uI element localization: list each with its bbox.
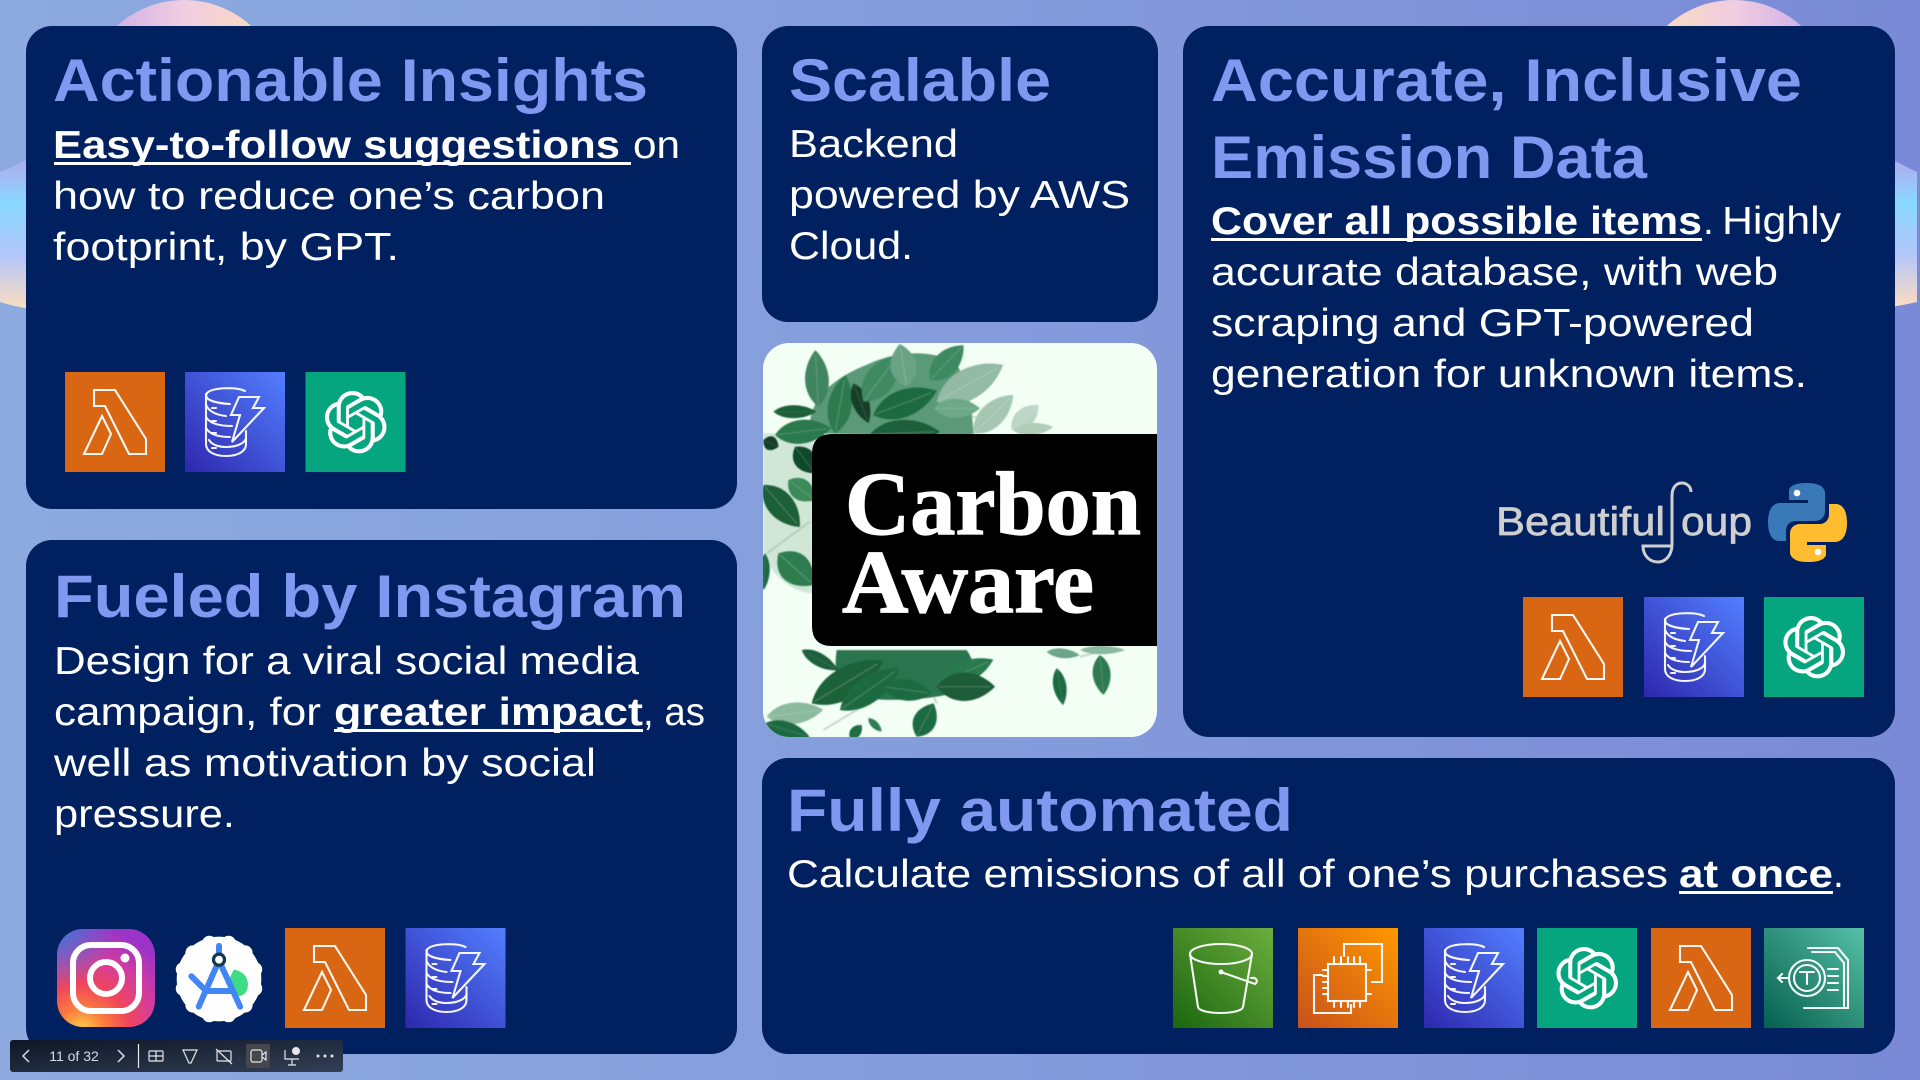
text block: emission data description: [1211, 200, 1842, 396]
text block: automation description: .: [1833, 853, 1844, 896]
text block: Instagram description: campaign, for: [54, 691, 321, 734]
icon: ChatGPT: [1764, 597, 1864, 697]
heading: Fueled by Instagram: Fueled by Instagram: [54, 563, 686, 630]
text block: emission data description: accurate database, with web: [1211, 251, 1778, 294]
text block: scalable description: Cloud.: [789, 225, 913, 268]
text block: Instagram description: pressure.: [54, 793, 235, 836]
text block: actionable insights description: on: [633, 124, 680, 167]
icon: ChatGPT: [1537, 928, 1637, 1028]
icon: DynamoDB: [1424, 928, 1524, 1028]
icon: AWS Lambda: [1523, 597, 1623, 697]
panel: Scalable: [762, 26, 1158, 322]
text block: automation description: Calculate emissions of all of one’s purchases: [787, 853, 1668, 896]
text block: emission data description: generation for unknown items.: [1211, 353, 1807, 396]
logo wordmark: Carbon Aware: Aware: [842, 533, 1094, 632]
black title plate: [812, 434, 1157, 646]
panel: Accurate, Inclusive Emission Data: [1183, 26, 1895, 737]
text block: scalable description: [789, 123, 1130, 268]
text block: emission data description: Highly: [1722, 200, 1842, 243]
heading: Actionable Insights: Actionable Insights: [53, 47, 648, 114]
logo: Beautiful Soup: Beautiful: [1496, 500, 1665, 544]
icon: ChatGPT: [306, 372, 406, 472]
heading: Scalable: Scalable: [789, 47, 1051, 114]
icon: Amazon Textract: [1764, 928, 1864, 1028]
icon: AWS Lambda: [65, 372, 165, 472]
icon: Amazon S3: [1173, 928, 1273, 1028]
panel: Actionable Insights: [26, 26, 737, 509]
text block: automation description: at once: [1679, 853, 1833, 896]
logo: Beautiful Soup: [1496, 483, 1752, 562]
text block: emission data description: .: [1703, 200, 1714, 243]
panel: Carbon Aware logo image: [753, 337, 1157, 745]
icon: AWS Lambda: [1651, 928, 1751, 1028]
text block: Instagram description: , as: [643, 691, 705, 734]
text block: actionable insights description: [53, 124, 680, 269]
text block: scalable description: Backend: [789, 123, 958, 166]
text block: Instagram description: well as motivation by social: [53, 742, 596, 785]
icon: DynamoDB: [1644, 597, 1744, 697]
slide counter: 11 of 32: [49, 1048, 99, 1064]
logo: Beautiful Soup: oup: [1681, 500, 1752, 544]
text block: emission data description: Cover all possible items: [1211, 200, 1702, 243]
icon: Amazon EC2: [1298, 928, 1398, 1028]
text block: Instagram description: Design for a viral social media: [54, 640, 639, 683]
icon: Android Studio: [176, 936, 262, 1022]
text block: emission data description: scraping and GPT-powered: [1211, 302, 1754, 345]
icon: Instagram: [57, 929, 155, 1027]
icon: DynamoDB: [406, 928, 506, 1028]
heading: Accurate, Inclusive Emission Data: [1211, 47, 1802, 191]
heading: Accurate, Inclusive Emission Data: Accurate, Inclusive: [1211, 47, 1802, 114]
foliage illustration: [753, 337, 1125, 745]
panel: Fully automated: [762, 758, 1895, 1054]
text block: Instagram description: greater impact: [334, 691, 643, 734]
text block: scalable description: powered by AWS: [789, 174, 1130, 217]
logo wordmark: Carbon Aware: Carbon: [845, 455, 1141, 554]
icon: AWS Lambda: [285, 928, 385, 1028]
icon: DynamoDB: [185, 372, 285, 472]
text block: actionable insights description: how to reduce one’s carbon: [53, 175, 605, 218]
heading: Fully automated: Fully automated: [787, 777, 1293, 844]
logo: Python: [1768, 483, 1847, 562]
text block: actionable insights description: Easy-to-follow suggestions: [53, 124, 620, 167]
heading: Accurate, Inclusive Emission Data: Emission Data: [1211, 124, 1648, 191]
panel: Fueled by Instagram: [26, 540, 737, 1054]
presentation toolbar: [10, 1040, 343, 1072]
text block: actionable insights description: footprint, by GPT.: [53, 226, 399, 269]
logo wordmark: Carbon Aware: [842, 470, 1140, 614]
text block: Instagram description: [53, 640, 705, 836]
